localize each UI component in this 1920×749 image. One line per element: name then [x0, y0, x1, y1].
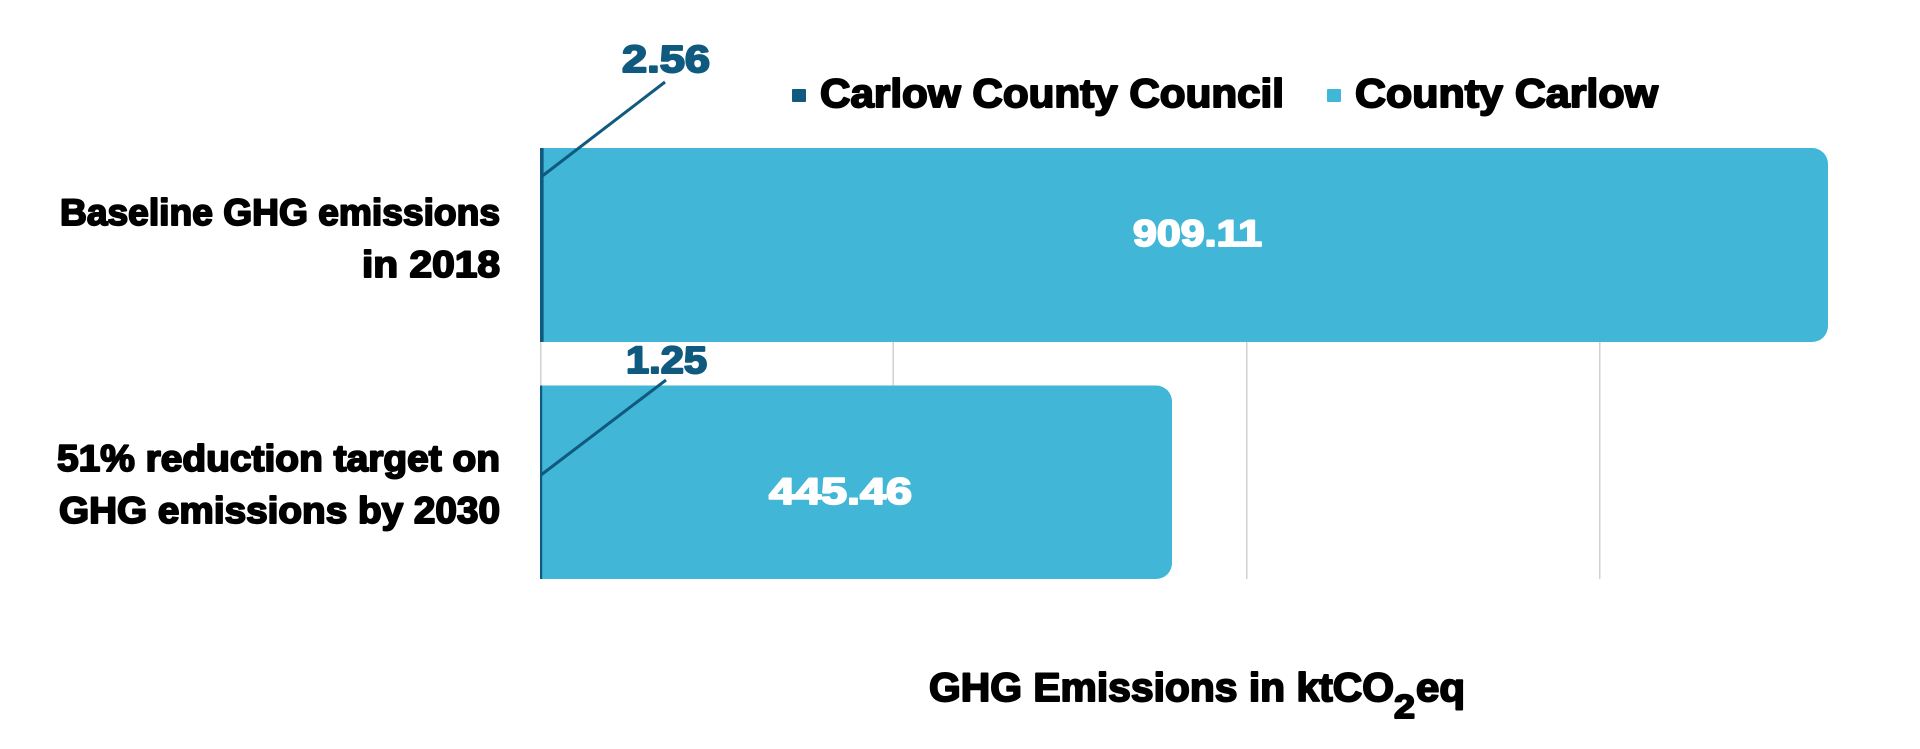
leader line: 1.25: [541, 380, 666, 475]
category label: target: 51% reduction target on: [57, 438, 500, 479]
bar: Carlow County Council target: [540, 386, 542, 579]
leader line: 2.56: [541, 82, 665, 177]
legend label: Carlow County Council: Carlow County Council: [820, 72, 1284, 116]
category label: baseline: [60, 192, 500, 285]
category label: target: GHG emissions by 2030: [59, 490, 500, 531]
bar: County Carlow baseline: [540, 148, 1828, 342]
category label: baseline: Baseline GHG emissions: [60, 192, 500, 233]
axis title: [929, 666, 1465, 725]
legend marker: County Carlow: [1327, 89, 1341, 102]
bar: County Carlow target: [540, 386, 1172, 579]
bar: Carlow County Council baseline: [540, 148, 544, 342]
value: 1.25: 1.25: [626, 340, 707, 382]
legend marker: Carlow County Council: [792, 89, 806, 102]
category label: target: [57, 438, 500, 531]
value: 2.56: 2.56: [622, 39, 710, 81]
bar group: 2030 target: [540, 340, 1172, 579]
axis title: eq: [1416, 666, 1465, 710]
axis title: GHG Emissions in ktCO: [929, 666, 1394, 710]
bar group: baseline 2018: [540, 39, 1828, 342]
legend label: County Carlow: County Carlow: [1355, 72, 1659, 116]
value: 445.46: 445.46: [769, 471, 912, 512]
legend: [792, 72, 1659, 116]
axis title: 2: [1394, 688, 1415, 725]
value: 909.11: 909.11: [1133, 213, 1262, 254]
category label: baseline: in 2018: [362, 244, 500, 285]
